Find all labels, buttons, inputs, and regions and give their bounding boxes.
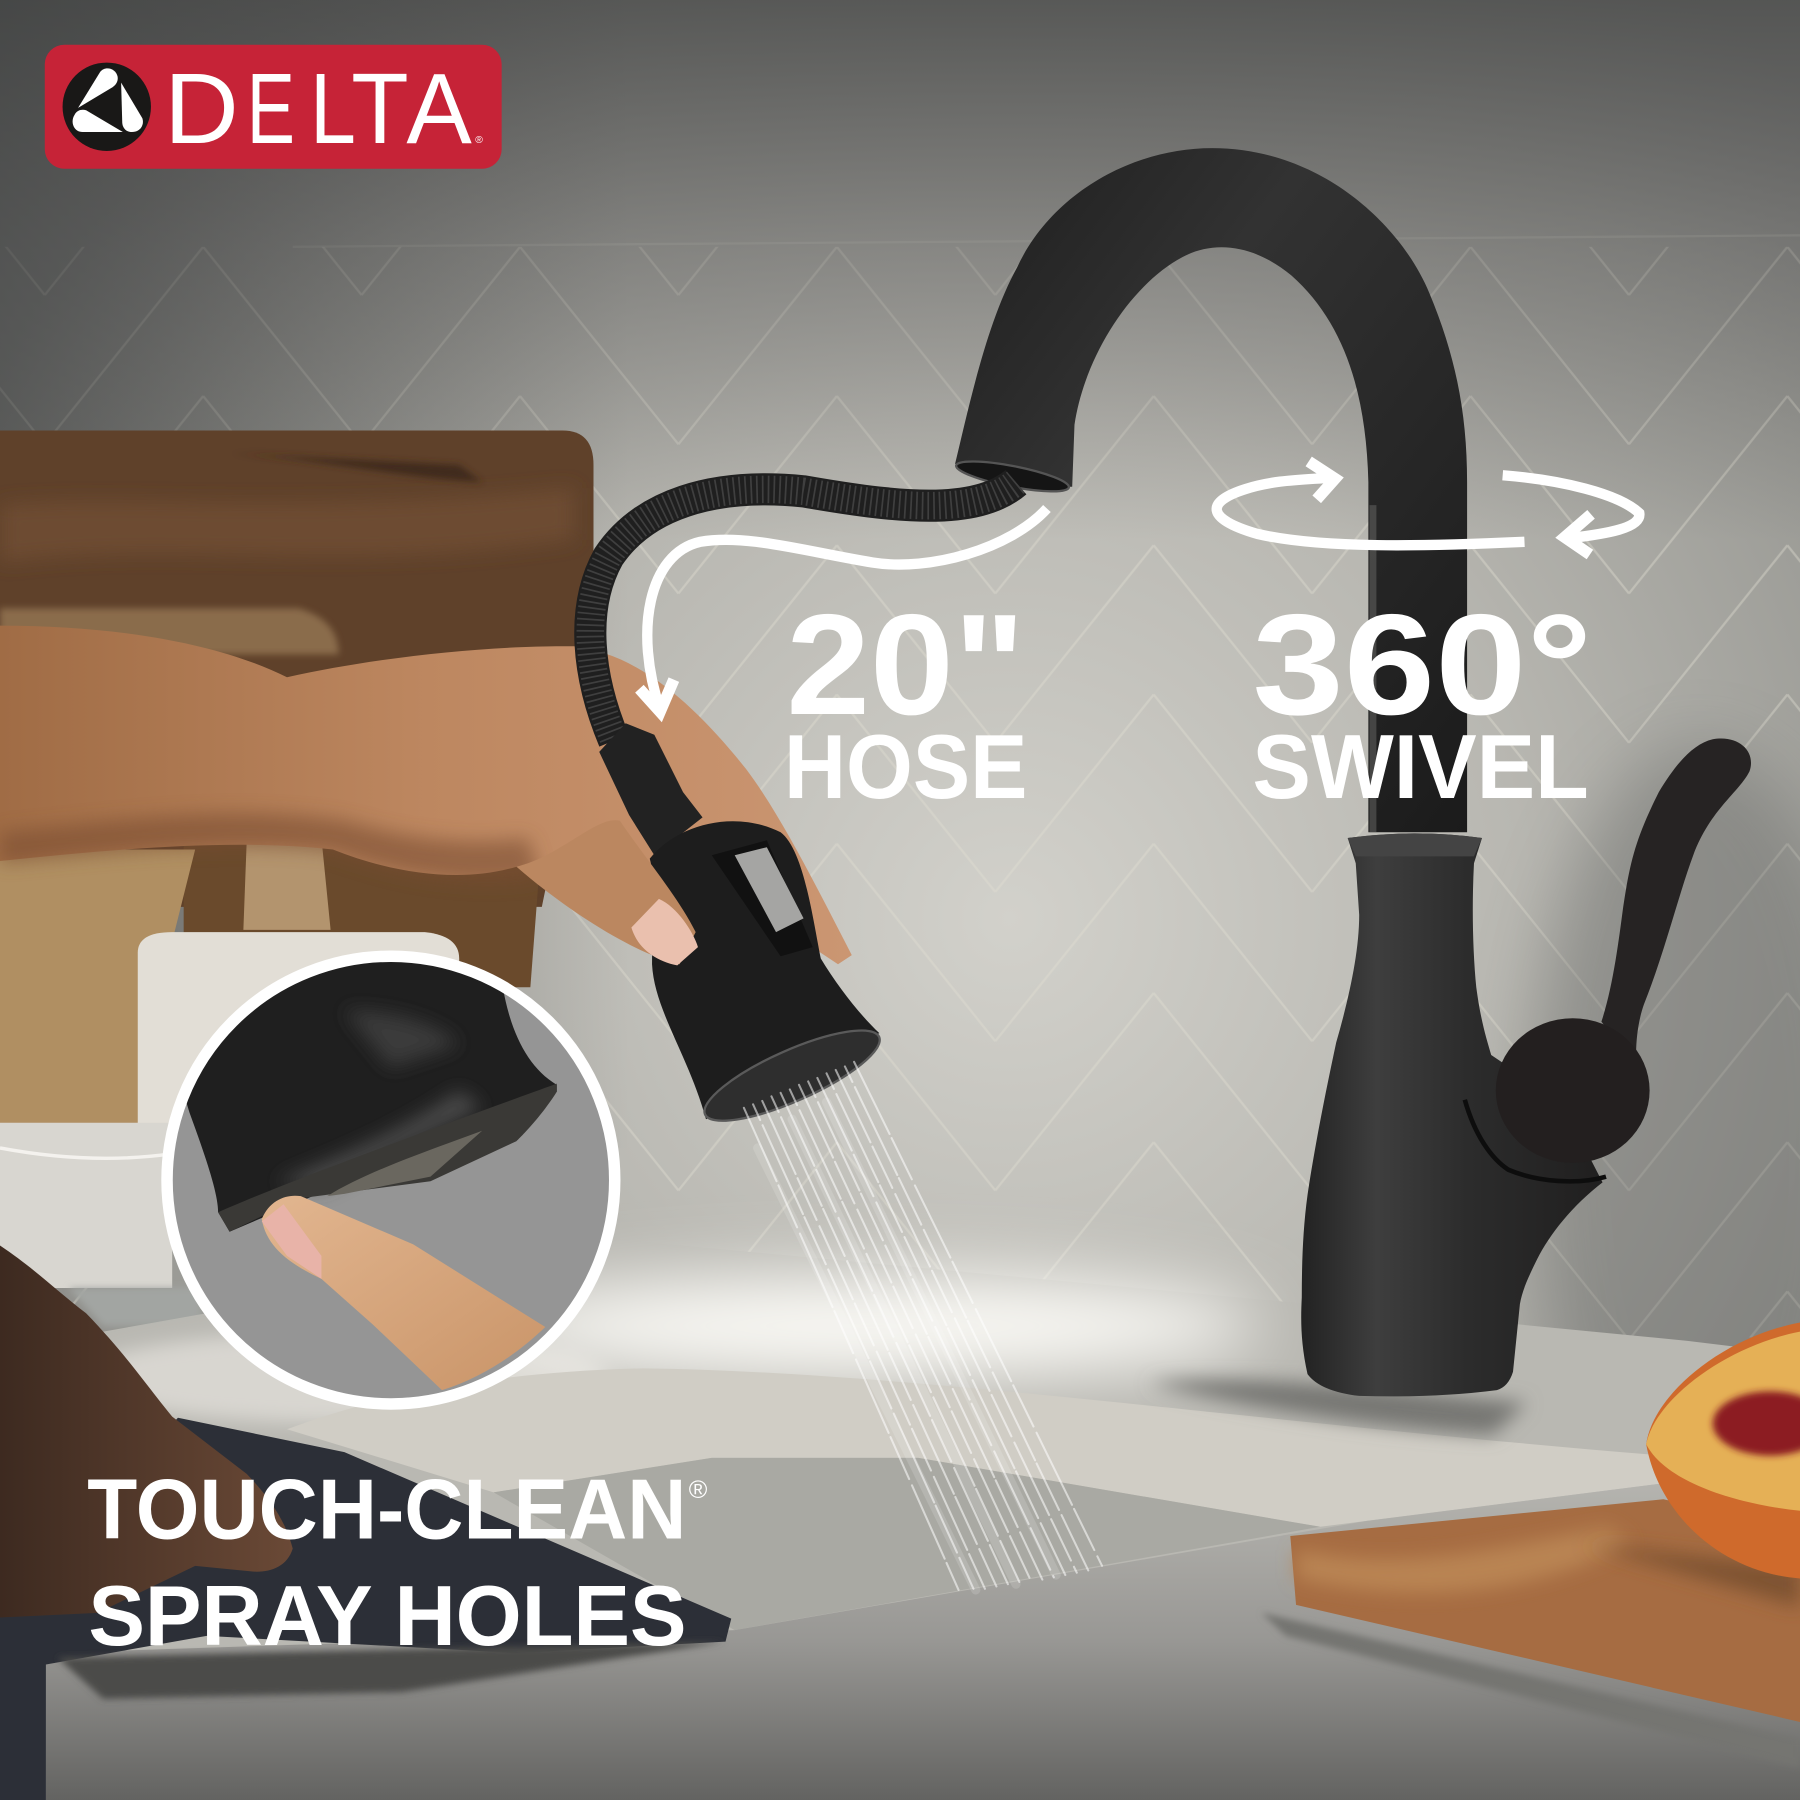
wordmark: A (406, 54, 472, 165)
label: touch-clean spray holes: ® (689, 1476, 708, 1504)
spray face rim (695, 1014, 889, 1137)
thumb in front of spray head (517, 820, 698, 965)
label: touch-clean spray holes (87, 1461, 708, 1663)
head body (650, 821, 879, 1119)
inset: spray head close-up (186, 962, 557, 1232)
label: touch-clean spray holes: SPRAY HOLES (88, 1568, 686, 1663)
inset circle: touch-clean spray holes (138, 941, 615, 1404)
label: 360 degree swivel (1252, 585, 1592, 818)
olive wood board (1262, 1499, 1800, 1768)
cup and glass bowl (0, 932, 459, 1326)
wordmark: D (164, 54, 239, 165)
label: 20 inch hose: 20" (786, 585, 1025, 745)
label: 360 degree swivel: SWIVEL (1252, 717, 1589, 818)
wordmark: E (247, 54, 295, 165)
water spray (744, 1062, 1102, 1590)
braided hose (590, 482, 1016, 740)
arrow: hose path (639, 509, 1047, 712)
inset: fingernail (262, 1204, 321, 1279)
registered mark: ® (475, 135, 483, 146)
slide button (712, 840, 813, 956)
wordmark: L (310, 54, 356, 165)
logo emblem (63, 63, 151, 151)
faucet base and handle (1301, 739, 1751, 1396)
label: touch-clean spray holes: TOUCH-CLEAN (87, 1461, 686, 1556)
spray head (599, 723, 889, 1137)
handle (1601, 739, 1751, 1068)
wordmark: T (351, 54, 409, 165)
lower left hand and towel (0, 1246, 731, 1800)
hose connector (599, 723, 703, 855)
arrow: 360 swivel (1217, 461, 1639, 554)
countertop and sink (0, 1240, 1800, 1800)
label: 20 inch hose (784, 585, 1027, 818)
wordmark (164, 54, 472, 165)
peach (1646, 1322, 1800, 1578)
inset: fingertip (262, 1196, 545, 1390)
label: 20 inch hose: HOSE (784, 717, 1027, 818)
arm and hand behind the hose (0, 626, 852, 964)
faucet spout (954, 148, 1467, 832)
Delta logo (45, 45, 502, 169)
label: 360 degree swivel: 360° (1252, 585, 1592, 745)
cutting boards (0, 430, 593, 1131)
faucet body (1301, 833, 1603, 1396)
